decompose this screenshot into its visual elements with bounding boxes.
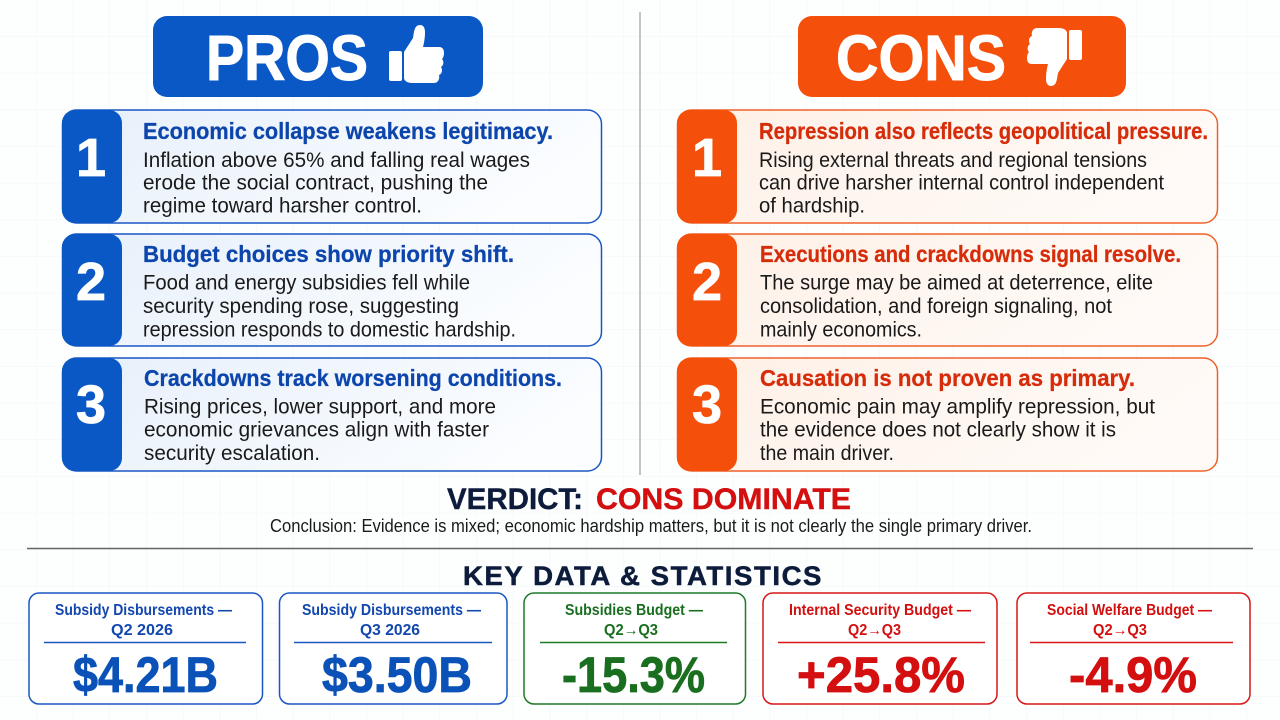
stat card: social welfare budget: Q2→Q3	[1093, 622, 1147, 639]
stat card: subsidy Q2	[29, 593, 262, 704]
panel: con 2: mainly economics.	[760, 318, 922, 342]
panel: pro 3: Rising prices, lower support, and more	[144, 396, 496, 418]
panel: pro 2: security spending rose, suggesting	[143, 295, 459, 318]
stat card: internal security budget	[763, 593, 997, 704]
stat card: subsidies budget: Q2→Q3	[604, 622, 658, 639]
heading: CONS: CONS	[836, 22, 1006, 94]
panel: pro 1: Inflation above 65% and falling real wages	[143, 149, 530, 172]
panel: con 1: 1	[692, 128, 722, 188]
panel: con 2: 2	[692, 252, 722, 312]
panel: con 3: Causation is not proven as primary.	[760, 365, 1135, 391]
panel: con 2	[677, 234, 1218, 346]
verdict: VERDICT:	[447, 483, 583, 516]
stat card: social welfare budget: Social Welfare Budget —	[1047, 602, 1212, 619]
panel: con 1: of hardship.	[759, 194, 865, 218]
panel: pro 1: Economic collapse weakens legitimacy.	[143, 118, 553, 144]
stat card: subsidy Q2: Subsidy Disbursements —	[55, 602, 232, 619]
verdict: CONS DOMINATE	[596, 483, 851, 516]
verdict	[447, 483, 851, 516]
stat card: subsidy Q2: $4.21B	[73, 647, 218, 703]
panel: pro 1: erode the social contract, pushing the	[143, 172, 488, 194]
icon: thumbs up	[389, 25, 444, 83]
panel: con 1	[677, 110, 1218, 223]
stat card: social welfare budget	[1017, 593, 1250, 704]
panel: con 3	[677, 358, 1218, 471]
heading: CONS	[798, 16, 1126, 97]
heading: key data: KEY DATA & STATISTICS	[463, 561, 823, 591]
panel: con 2: The surge may be aimed at deterrence, elite	[760, 272, 1153, 294]
panel: pro 2: Food and energy subsidies fell while	[143, 272, 470, 294]
stat card: internal security budget: +25.8%	[797, 647, 965, 703]
panel: pro 3	[62, 358, 602, 471]
stat card: subsidy Q3: Subsidy Disbursements —	[302, 602, 481, 619]
icon: thumbs down	[1027, 28, 1082, 86]
conclusion text: Conclusion: Evidence is mixed; economic hardship matters, but it is not clearly the single primary driver.	[270, 516, 1032, 536]
panel: con 3: Economic pain may amplify repression, but	[760, 396, 1155, 418]
heading: PROS: PROS	[206, 22, 368, 94]
panel: pro 1: 1	[76, 128, 106, 188]
panel: pro 2: Budget choices show priority shift.	[143, 241, 514, 267]
panel: con 2: consolidation, and foreign signaling, not	[760, 295, 1112, 318]
panel: pro 3: 3	[76, 375, 106, 435]
panel: con 1: can drive harsher internal control independent	[759, 172, 1164, 194]
stat card: subsidies budget: Subsidies Budget —	[565, 602, 703, 619]
stat card: subsidies budget	[524, 593, 746, 704]
panel: pro 3: security escalation.	[144, 442, 320, 465]
panel: pro 2: repression responds to domestic hardship.	[143, 318, 516, 342]
heading: PROS	[153, 16, 483, 97]
panel: con 3: 3	[692, 375, 722, 435]
panel: pro 3: economic grievances align with faster	[144, 418, 489, 442]
stat card: social welfare budget: -4.9%	[1069, 647, 1197, 703]
stat card: internal security budget: Internal Security Budget —	[789, 602, 971, 619]
panel: con 1: Rising external threats and regional tensions	[759, 149, 1147, 172]
stat card: subsidy Q2: Q2 2026	[111, 622, 173, 639]
panel: con 3: the main driver.	[760, 442, 894, 465]
panel: pro 3: Crackdowns track worsening conditions.	[144, 365, 562, 391]
panel: pro 2: 2	[76, 252, 106, 312]
stat card: internal security budget: Q2→Q3	[848, 622, 901, 639]
panel: con 2: Executions and crackdowns signal resolve.	[760, 241, 1181, 267]
panel: con 1: Repression also reflects geopolitical pressure.	[759, 118, 1208, 144]
panel: con 3: the evidence does not clearly show it is	[760, 418, 1116, 442]
stat card: subsidies budget: -15.3%	[562, 647, 705, 703]
stat card: subsidy Q3: Q3 2026	[360, 622, 420, 639]
panel: pro 2	[62, 234, 602, 346]
stat card: subsidy Q3	[280, 593, 507, 704]
panel: pro 1	[62, 110, 602, 223]
stat card: subsidy Q3: $3.50B	[322, 647, 472, 703]
panel: pro 1: regime toward harsher control.	[143, 194, 422, 218]
